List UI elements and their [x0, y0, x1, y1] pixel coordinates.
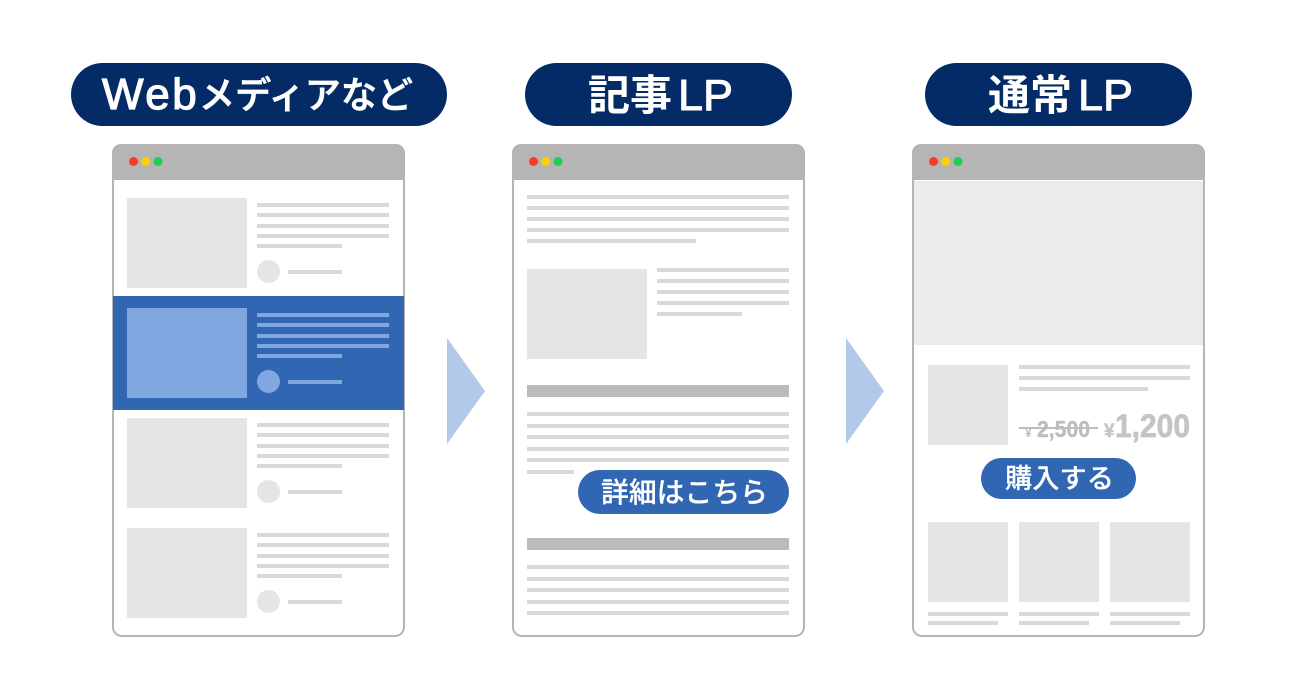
window buttons — [929, 157, 962, 166]
highlighted article card — [113, 296, 404, 410]
heading: Webメディアなど: メディアなど — [199, 75, 413, 116]
hero image — [914, 181, 1203, 345]
panel: regular LP browser — [912, 144, 1205, 636]
old price: 2,500 — [1037, 416, 1090, 442]
arrow 1 — [447, 338, 485, 444]
heading: 記事LP: 記事 — [588, 72, 672, 119]
new price: 1,200 — [1115, 408, 1190, 444]
button: 購入する — [981, 458, 1136, 499]
arrow 2 — [846, 338, 884, 444]
heading: 記事LP: LP — [678, 71, 733, 120]
window buttons — [129, 157, 162, 166]
old price: ¥ — [1025, 426, 1032, 440]
related product 1 — [928, 522, 1008, 625]
heading: Webメディアなど — [71, 63, 447, 126]
related product 3 — [1110, 522, 1190, 625]
intro text lines — [527, 195, 789, 243]
article card 1 — [127, 198, 389, 288]
browser title bar — [112, 144, 405, 180]
button: 詳細はこちら — [578, 470, 789, 514]
section 1 heading and text — [527, 385, 789, 474]
article card 4 — [127, 528, 389, 618]
related product 2 — [1019, 522, 1099, 625]
product text lines — [1019, 365, 1190, 391]
heading: 通常LP — [925, 63, 1192, 126]
heading: 記事LP — [525, 63, 792, 126]
panel: article LP browser — [512, 144, 805, 636]
browser title bar — [912, 144, 1205, 180]
heading: 通常LP: LP — [1078, 71, 1133, 120]
image with text — [527, 268, 789, 359]
new price: ¥ — [1104, 421, 1115, 442]
product image — [928, 365, 1008, 445]
panel: Web media browser — [112, 144, 405, 636]
section 2 heading and text — [527, 538, 789, 615]
button: 購入する: 購入する — [1005, 464, 1114, 494]
button: 詳細はこちら: 詳細はこちら — [601, 477, 768, 508]
article card 3 — [127, 418, 389, 508]
window buttons — [529, 157, 562, 166]
heading: 通常LP: 通常 — [988, 72, 1072, 119]
heading: Webメディアなど: Web — [102, 70, 199, 119]
browser title bar — [512, 144, 805, 180]
